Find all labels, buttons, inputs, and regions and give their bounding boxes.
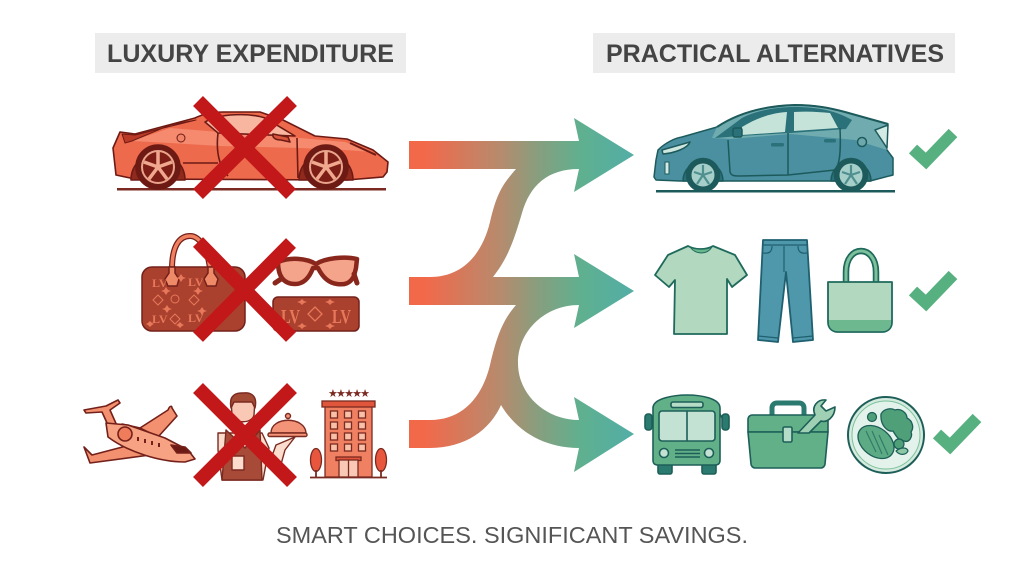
heading: practical alternatives: PRACTICAL ALTERNATIVES bbox=[606, 40, 944, 68]
icon: check mark for car bbox=[913, 133, 953, 161]
arrows: flow from luxury to practical bbox=[409, 118, 634, 472]
icon: designer handbag: LV bbox=[152, 276, 168, 290]
icon: check mark for transit and meal bbox=[937, 418, 977, 446]
icon: private jet bbox=[84, 400, 195, 463]
icon: healthy meal plate bbox=[848, 397, 924, 473]
icon: designer handbag bbox=[142, 236, 245, 331]
icon: practical hybrid car bbox=[654, 105, 895, 192]
icon: five star hotel bbox=[310, 387, 387, 478]
icon: designer handbag: LV bbox=[188, 275, 204, 289]
icon: check mark for clothing bbox=[913, 275, 953, 303]
tagline: SMART CHOICES. SIGNIFICANT SAVINGS. bbox=[276, 522, 748, 548]
icon: red cross over waiter bbox=[198, 388, 292, 482]
icon: designer wallet: LV bbox=[281, 306, 300, 328]
icon: designer wallet bbox=[273, 297, 359, 331]
heading: practical alternatives bbox=[593, 33, 955, 73]
icon: luxury sports car bbox=[113, 112, 388, 190]
heading: luxury expenditure: LUXURY EXPENDITURE bbox=[107, 40, 394, 68]
icon: designer wallet: LV bbox=[332, 306, 351, 328]
icon: bus bbox=[645, 395, 729, 474]
heading: luxury expenditure bbox=[95, 33, 406, 73]
icon: red cross over car bbox=[198, 101, 292, 194]
icon: designer sunglasses bbox=[275, 258, 357, 284]
icon: designer handbag: LV bbox=[188, 311, 204, 325]
icon: jeans bbox=[758, 240, 813, 342]
icon: toolbox with wrench bbox=[748, 400, 835, 468]
icon: red cross over handbag and accessories bbox=[198, 242, 291, 337]
icon: t-shirt bbox=[655, 246, 747, 334]
icon: waiter with cloche bbox=[218, 393, 307, 480]
icon: five star hotel: ★★★★★ bbox=[328, 387, 370, 400]
icon: designer handbag: LV bbox=[152, 312, 168, 326]
icon: tote bag bbox=[828, 251, 892, 332]
